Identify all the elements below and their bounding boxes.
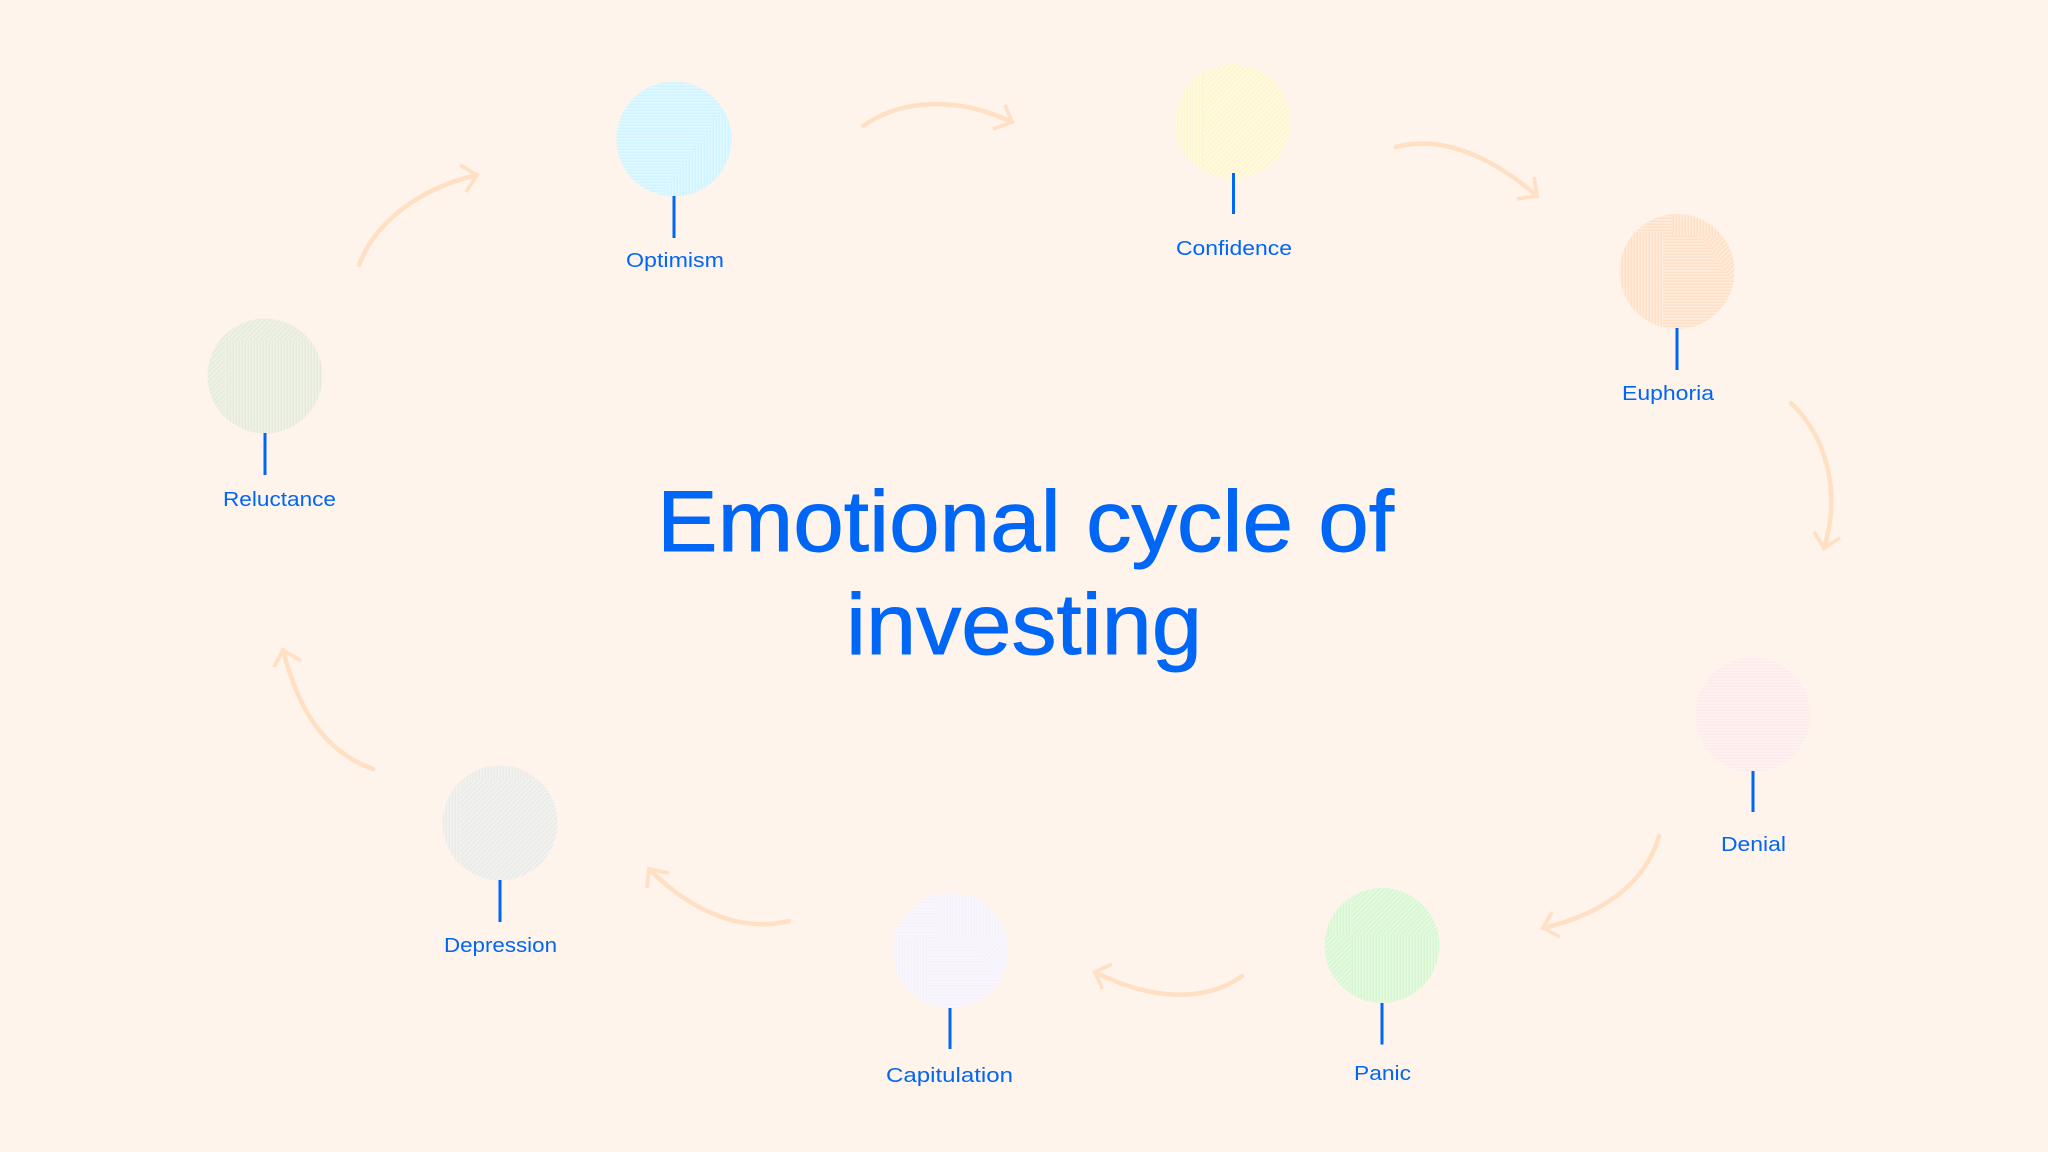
node: Reluctance (205, 316, 336, 511)
stem: Denial (1752, 771, 1754, 812)
node: Denial (1693, 655, 1813, 856)
stem: Confidence (1232, 173, 1235, 214)
stem: Capitulation (948, 1008, 952, 1049)
arrow: Confidence to Euphoria (1396, 144, 1537, 199)
arrow: Denial to Panic (1543, 836, 1659, 937)
label: Depression: Depression (444, 935, 557, 957)
node: Panic (1322, 885, 1442, 1085)
label: Capitulation: Capitulation (886, 1065, 1013, 1087)
circle: Optimism (614, 79, 735, 200)
label: Panic: Panic (1354, 1063, 1411, 1085)
arrow: Capitulation to Depression (647, 869, 789, 924)
circle: Capitulation (890, 890, 1010, 1010)
label: Reluctance: Reluctance (223, 489, 336, 511)
arrow: Panic to Capitulation (1095, 964, 1242, 995)
stem: Optimism (672, 196, 676, 238)
circle: Panic (1322, 885, 1442, 1005)
circle: Depression (440, 763, 560, 883)
arrow: Depression to Reluctance (274, 650, 373, 769)
node: Confidence (1173, 62, 1293, 260)
node: Euphoria (1617, 212, 1740, 405)
title (657, 474, 1395, 673)
label: Euphoria: Euphoria (1622, 383, 1715, 405)
label: Confidence: Confidence (1176, 238, 1292, 260)
stem: Reluctance (264, 433, 266, 475)
circle: Euphoria (1620, 214, 1734, 329)
node: Depression (440, 763, 560, 957)
node: Capitulation (886, 890, 1013, 1087)
stem: Depression (498, 880, 502, 922)
stem: Euphoria (1676, 328, 1678, 370)
arrow: Reluctance to Optimism (359, 165, 477, 265)
label: Denial: Denial (1721, 834, 1786, 856)
label: Optimism: Optimism (626, 250, 724, 272)
circle: Denial (1696, 658, 1810, 771)
title: investing (846, 577, 1202, 673)
node: Optimism (614, 79, 735, 272)
arrow: Optimism to Confidence (863, 104, 1012, 129)
circle: Reluctance (205, 316, 325, 436)
stem: Panic (1380, 1003, 1384, 1044)
title: Emotional cycle of (657, 474, 1395, 570)
arrow: Euphoria to Denial (1791, 403, 1840, 548)
circle: Confidence (1173, 62, 1293, 182)
